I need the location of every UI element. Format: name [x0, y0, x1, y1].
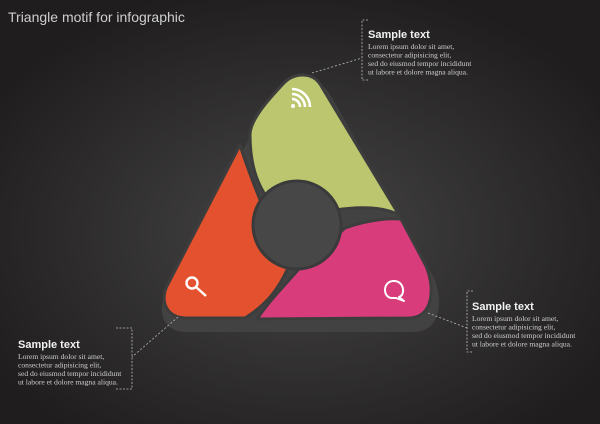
segment: pink — [257, 219, 431, 319]
callout: left: sed do eiusmod tempor incididunt — [18, 369, 122, 378]
segment: red — [164, 145, 288, 318]
center circle — [253, 181, 341, 269]
callout: right: sed do eiusmod tempor incididunt — [472, 331, 576, 340]
callout: top: consectetur adipisicing elit, — [368, 50, 451, 60]
callout: top: ut labore et dolore magna aliqua. — [368, 68, 468, 76]
icon: rss — [291, 89, 310, 108]
callout: left: consectetur adipisicing elit, — [18, 360, 101, 370]
callout: right: Lorem ipsum dolor sit amet, — [472, 314, 558, 323]
callout: right: consectetur adipisicing elit, — [472, 322, 555, 332]
callout: right — [428, 291, 576, 352]
callout: left: Lorem ipsum dolor sit amet, — [18, 352, 104, 361]
callout: right: Sample text — [472, 301, 534, 313]
callout: top: Sample text — [368, 29, 430, 41]
title: Triangle motif for infographic — [8, 9, 185, 25]
callout: right: ut labore et dolore magna aliqua. — [472, 340, 572, 348]
callout: top: Lorem ipsum dolor sit amet, — [368, 42, 454, 51]
callout: left — [18, 317, 178, 389]
segment: green — [250, 75, 399, 215]
icon: speech bubble — [385, 281, 404, 301]
callout: top: sed do eiusmod tempor incididunt — [368, 59, 472, 68]
triangle shadow — [162, 78, 439, 332]
diagram: triangle — [164, 75, 431, 319]
callout: left: ut labore et dolore magna aliqua. — [18, 378, 118, 386]
callout: top — [312, 20, 472, 80]
icon: magnifier — [186, 278, 206, 296]
callout: left: Sample text — [18, 339, 80, 351]
